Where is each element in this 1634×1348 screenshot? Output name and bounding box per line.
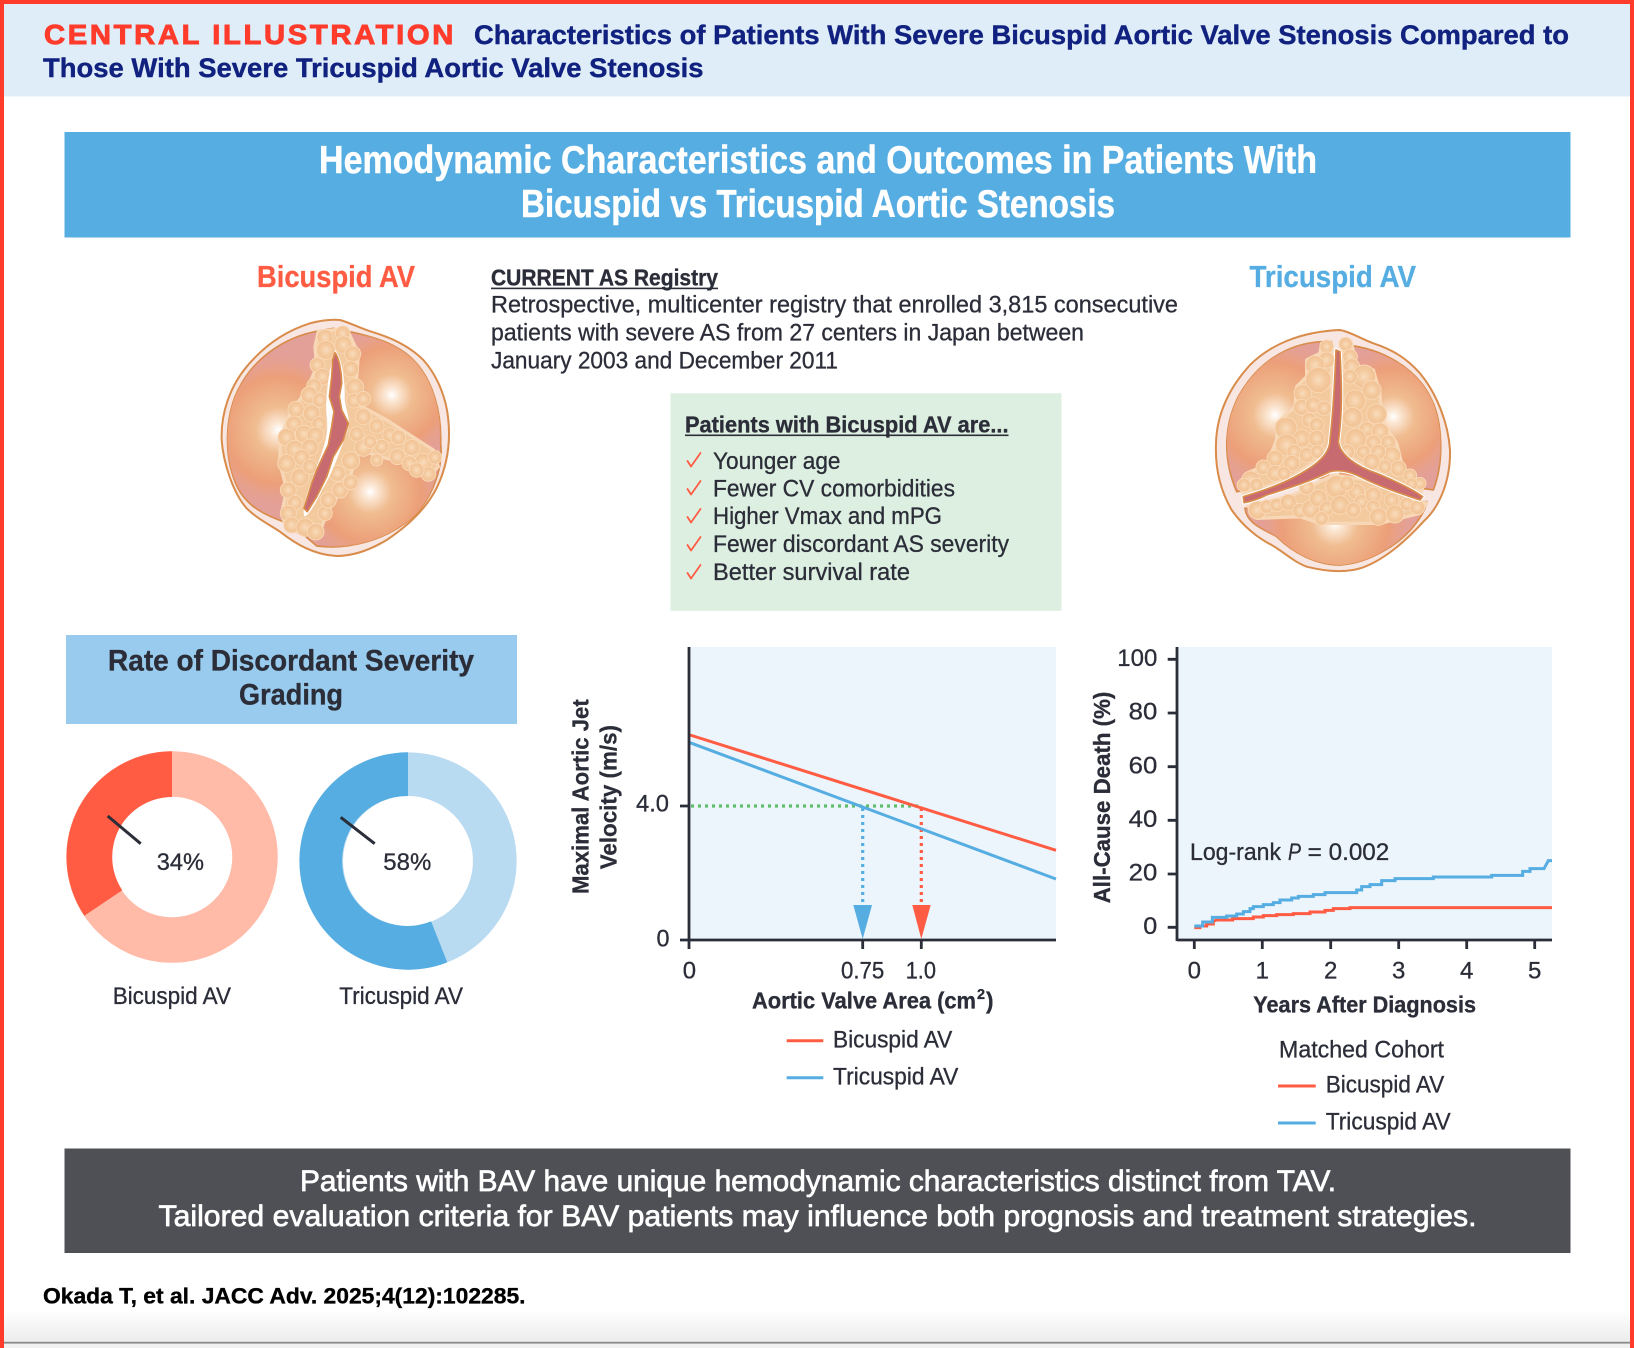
header title: Those With Severe Tricuspid Aortic Valve Stenosis <box>43 53 704 83</box>
x tick labels: 0 <box>1188 957 1201 984</box>
panel: rate of discordant severity grading heading: Rate of Discordant Severity <box>108 644 474 677</box>
log-rank annotation: P <box>1288 839 1301 866</box>
x tick labels: 2 <box>1324 957 1337 984</box>
axis tick labels: 0 <box>656 926 670 953</box>
legend: Tricuspid AV <box>833 1064 958 1091</box>
x tick labels: 3 <box>1392 957 1405 984</box>
text block: CURRENT AS Registry: January 2003 and December 2011 <box>491 348 838 375</box>
donut chart: bicuspid 34% <box>67 751 255 1010</box>
x axis title: 2 <box>977 986 985 1003</box>
banner heading: Bicuspid vs Tricuspid Aortic Stenosis <box>521 183 1115 226</box>
arrow: 0.75 <box>853 905 872 939</box>
donut chart: bicuspid 34%: Bicuspid AV <box>113 983 231 1010</box>
y axis title: All-Cause Death (%) <box>1089 692 1115 903</box>
x tick labels: 4 <box>1460 957 1473 984</box>
donut chart: tricuspid 58%: Tricuspid AV <box>339 983 463 1010</box>
citation: Okada T, et al. JACC Adv. 2025;4(12):102285. <box>43 1284 526 1308</box>
y axis title <box>567 699 622 894</box>
y tick labels: 60 <box>1129 752 1157 779</box>
line chart: jet velocity vs valve area <box>567 647 1056 1091</box>
banner heading: Hemodynamic Characteristics and Outcomes in Patients With <box>319 139 1317 182</box>
legend: Bicuspid AV <box>1326 1072 1444 1099</box>
arrow: 1.0 <box>912 905 931 939</box>
text block: CURRENT AS Registry: CURRENT AS Registry <box>491 264 718 290</box>
x tick labels <box>1188 957 1541 984</box>
threshold dotted guide lines <box>691 806 921 905</box>
x tick labels: 5 <box>1528 957 1541 984</box>
curves <box>1194 861 1553 928</box>
axis tick labels <box>636 791 936 984</box>
banner heading <box>64 132 1570 238</box>
panel: patients with bicuspid AV: Patients with Bicuspid AV are... <box>685 412 1008 438</box>
x axis title: Aortic Valve Area (cm <box>752 988 976 1014</box>
panel: rate of discordant severity grading heading <box>66 635 517 724</box>
axis tick labels: 0.75 <box>841 957 884 984</box>
log-rank annotation <box>1190 839 1389 866</box>
text block: CURRENT AS Registry: patients with severe AS from 27 centers in Japan between <box>491 320 1084 347</box>
x axis title: ) <box>986 988 994 1014</box>
axes <box>1168 647 1552 949</box>
x axis title: Years After Diagnosis <box>1253 992 1476 1018</box>
series: tricuspid <box>690 743 1056 879</box>
y axis title: Maximal Aortic Jet <box>567 699 593 894</box>
legend: Matched Cohort <box>1279 1036 1444 1064</box>
panel: rate of discordant severity grading heading: Grading <box>239 679 343 712</box>
legend: Bicuspid AV <box>833 1027 952 1054</box>
Kaplan-Meier chart: all-cause death <box>1089 645 1553 1136</box>
axis tick labels: 0 <box>683 957 696 984</box>
icons: check marks <box>688 453 700 578</box>
axis tick labels: 4.0 <box>636 791 669 818</box>
legend: Tricuspid AV <box>1326 1108 1451 1136</box>
text block: CURRENT AS Registry: Retrospective, multicenter registry that enrolled 3,815 consecutive <box>491 292 1178 319</box>
header title <box>43 20 1569 83</box>
panel: patients with bicuspid AV: Fewer discordant AS severity <box>713 531 1009 558</box>
heading: tricuspid AV: Tricuspid AV <box>1250 259 1416 294</box>
panel: patients with bicuspid AV: Better survival rate <box>713 559 910 586</box>
legend <box>1278 1036 1451 1136</box>
x tick labels: 1 <box>1256 957 1269 984</box>
panel: patients with bicuspid AV: Higher Vmax and mPG <box>713 503 942 530</box>
log-rank annotation: = 0.002 <box>1308 839 1389 866</box>
illustration: tricuspid valve <box>1214 329 1451 572</box>
heading: bicuspid AV: Bicuspid AV <box>257 259 415 294</box>
y axis title: Velocity (m/s) <box>596 725 622 869</box>
panel: patients with bicuspid AV <box>670 393 1062 611</box>
donut chart: tricuspid 58%: 58% <box>383 849 431 876</box>
y tick labels: 20 <box>1129 860 1157 887</box>
conclusion bar <box>64 1148 1570 1253</box>
legend <box>787 1027 958 1091</box>
label: central illustration: CENTRAL ILLUSTRATION <box>44 19 456 50</box>
panel: patients with bicuspid AV: Younger age <box>713 448 840 475</box>
y tick labels: 100 <box>1117 645 1157 672</box>
series: bicuspid <box>690 735 1056 850</box>
axis tick labels: 1.0 <box>906 957 936 984</box>
conclusion bar: Patients with BAV have unique hemodynamic characteristics distinct from TAV. <box>300 1165 1336 1198</box>
log-rank annotation: Log-rank <box>1190 839 1282 866</box>
y tick labels: 40 <box>1129 806 1157 833</box>
header title: Characteristics of Patients With Severe Bicuspid Aortic Valve Stenosis Compared to <box>474 20 1569 50</box>
conclusion bar: Tailored evaluation criteria for BAV patients may influence both prognosis and treatment strategies. <box>158 1200 1477 1233</box>
donut chart: bicuspid 34%: 34% <box>157 849 204 876</box>
panel: patients with bicuspid AV: Fewer CV comorbidities <box>713 476 955 503</box>
illustration: bicuspid valve <box>220 318 450 557</box>
donut chart: tricuspid 58% <box>299 752 495 1010</box>
y tick labels <box>1117 645 1157 940</box>
y tick labels: 0 <box>1143 913 1157 940</box>
axes <box>680 647 1056 949</box>
header band <box>4 4 1630 96</box>
text block: CURRENT AS Registry <box>491 264 1178 375</box>
y tick labels: 80 <box>1129 698 1157 725</box>
